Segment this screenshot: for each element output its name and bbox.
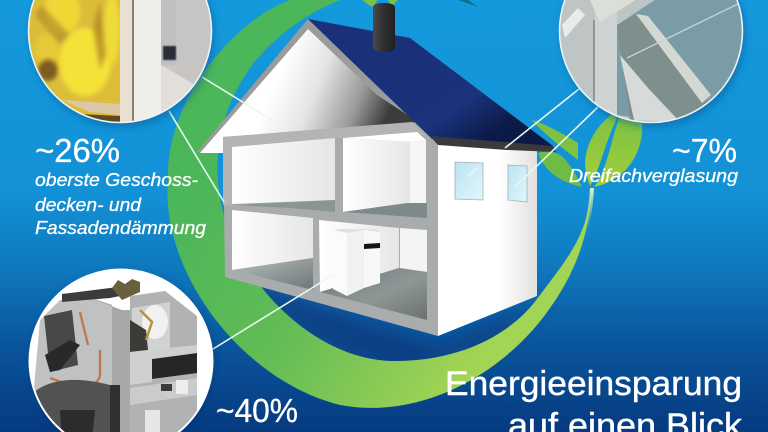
- text: 26 percent block: [35, 132, 207, 238]
- dark clip: [163, 46, 176, 60]
- house shadow: [225, 270, 545, 372]
- brown fold 1: [35, 5, 70, 45]
- heading line 1: Energieeinsparung: [445, 365, 742, 403]
- small switch: [161, 384, 172, 391]
- pane interior shadow: [617, 15, 708, 120]
- leaves right: [532, 112, 642, 187]
- glass pane: [617, 0, 742, 117]
- copper pipe: [50, 312, 100, 387]
- leaf cluster: [362, 0, 398, 7]
- bright blob right: [104, 0, 120, 64]
- bright blob low: [59, 28, 111, 96]
- bright blob left: [36, 34, 58, 64]
- photo base: [123, 18, 210, 122]
- label line 1: oberste Geschoss-: [35, 169, 198, 190]
- house: [197, 19, 556, 336]
- room bottom right back wall: [319, 220, 399, 292]
- brown spot: [38, 59, 58, 81]
- circle ring: [560, 0, 742, 122]
- line window 1: [505, 89, 579, 148]
- yellow insulation: [25, 0, 121, 125]
- lower plate: [130, 378, 197, 405]
- room top right side wall: [410, 140, 426, 205]
- compressor block: [44, 310, 78, 372]
- value: ~26%: [35, 132, 120, 169]
- side wall: [430, 143, 537, 336]
- swirl stem highlight: [582, 188, 594, 232]
- frame vertical: [595, 12, 617, 115]
- heat pump middle face: [347, 230, 364, 296]
- right cabinet: [130, 291, 197, 432]
- bright blob top: [44, 0, 80, 34]
- pipes top: [62, 288, 140, 302]
- line insulation attic: [202, 77, 285, 128]
- grey wall: [161, 0, 176, 65]
- photo content: [30, 279, 197, 432]
- room top right floor: [343, 203, 427, 218]
- leaf left upper: [532, 120, 578, 160]
- upper chamber: [132, 302, 170, 352]
- lower lit panel: [620, 55, 680, 122]
- window right: [508, 165, 527, 202]
- reflected line: [627, 2, 742, 58]
- callout lines: [169, 77, 598, 349]
- text: 40 percent value: ~40%: [216, 392, 298, 429]
- circle shadow: [561, 0, 745, 127]
- white module: [176, 380, 188, 394]
- line heat pump: [213, 275, 333, 349]
- left light stripe: [562, 8, 585, 38]
- window left: [455, 162, 483, 200]
- lower wall: [161, 65, 194, 112]
- attic interior: [200, 29, 417, 153]
- room bottom right side wall: [400, 228, 427, 272]
- white post: [132, 0, 161, 125]
- swirl band: [167, 0, 592, 408]
- roof eave: [430, 136, 556, 152]
- line window 2: [515, 107, 598, 187]
- label line 2: decken- und: [35, 194, 142, 215]
- text: 7 percent block: [569, 132, 739, 186]
- photo content: [560, 0, 742, 122]
- grey section frame: [223, 122, 438, 336]
- circle ring: [28, 0, 212, 122]
- brass fitting: [140, 310, 152, 340]
- top sill: [590, 0, 636, 22]
- room top left floor: [233, 200, 335, 212]
- tank dark lower: [60, 410, 95, 432]
- tank: [34, 380, 110, 432]
- burner unit: [142, 305, 168, 339]
- gable front: [197, 19, 430, 153]
- heat pump left face: [333, 230, 347, 296]
- line insulation facade: [169, 111, 224, 202]
- black valve group: [45, 340, 80, 372]
- circle shadow: [30, 0, 214, 127]
- wall light: [176, 0, 216, 85]
- circle ring: [30, 270, 212, 432]
- heat pump display: [364, 243, 380, 249]
- wood frame: [120, 0, 132, 125]
- circle: heat pump photo: [29, 269, 214, 432]
- circle: insulation photo: [25, 0, 216, 127]
- centre post: [93, 299, 130, 432]
- heading: [445, 365, 743, 432]
- black panel: [152, 353, 197, 379]
- attic floor band: [223, 122, 425, 205]
- line window small: [468, 168, 477, 176]
- dark post side: [110, 385, 120, 432]
- circle shadow: [30, 272, 214, 432]
- post dark stripe: [132, 0, 134, 125]
- brown fold 2: [93, 0, 106, 70]
- chimney: [373, 3, 395, 52]
- label: Dreifachverglasung: [569, 165, 739, 186]
- frame dark slit: [593, 20, 595, 102]
- circle: window photo: [555, 0, 750, 130]
- room top left wall: [232, 138, 335, 204]
- room bottom left floor: [232, 258, 313, 290]
- green swirl arrow: [167, 0, 594, 408]
- wood batten bottom: [62, 100, 120, 115]
- dark inner part: [130, 320, 148, 352]
- light shelf: [130, 345, 197, 385]
- dark leaf sliver: [458, 0, 478, 7]
- leaf center right half: [594, 118, 642, 187]
- top fittings: [112, 279, 140, 300]
- leaf left lower: [538, 152, 582, 187]
- back grey wall: [34, 299, 112, 391]
- insulation blobs: [35, 0, 120, 96]
- leaves at chimney top: [362, 0, 478, 7]
- value: ~7%: [672, 132, 737, 169]
- room bottom right floor: [320, 268, 427, 320]
- lower module: [145, 410, 160, 432]
- dark batten edge: [80, 114, 120, 122]
- heat pump unit: [333, 229, 380, 296]
- room top right wall: [343, 138, 410, 212]
- room bottom left wall: [232, 210, 313, 270]
- roof: [308, 19, 553, 150]
- photo content: [25, 0, 216, 125]
- heat pump top: [333, 229, 380, 233]
- label line 3: Fassadendämmung: [35, 217, 207, 238]
- white disc: [29, 269, 213, 432]
- leaf center left half: [585, 112, 617, 186]
- photo base: [560, 0, 740, 122]
- diagonal glazing bar: [636, 14, 711, 103]
- room top right ceiling strip: [343, 132, 426, 142]
- heat pump right face: [364, 230, 380, 288]
